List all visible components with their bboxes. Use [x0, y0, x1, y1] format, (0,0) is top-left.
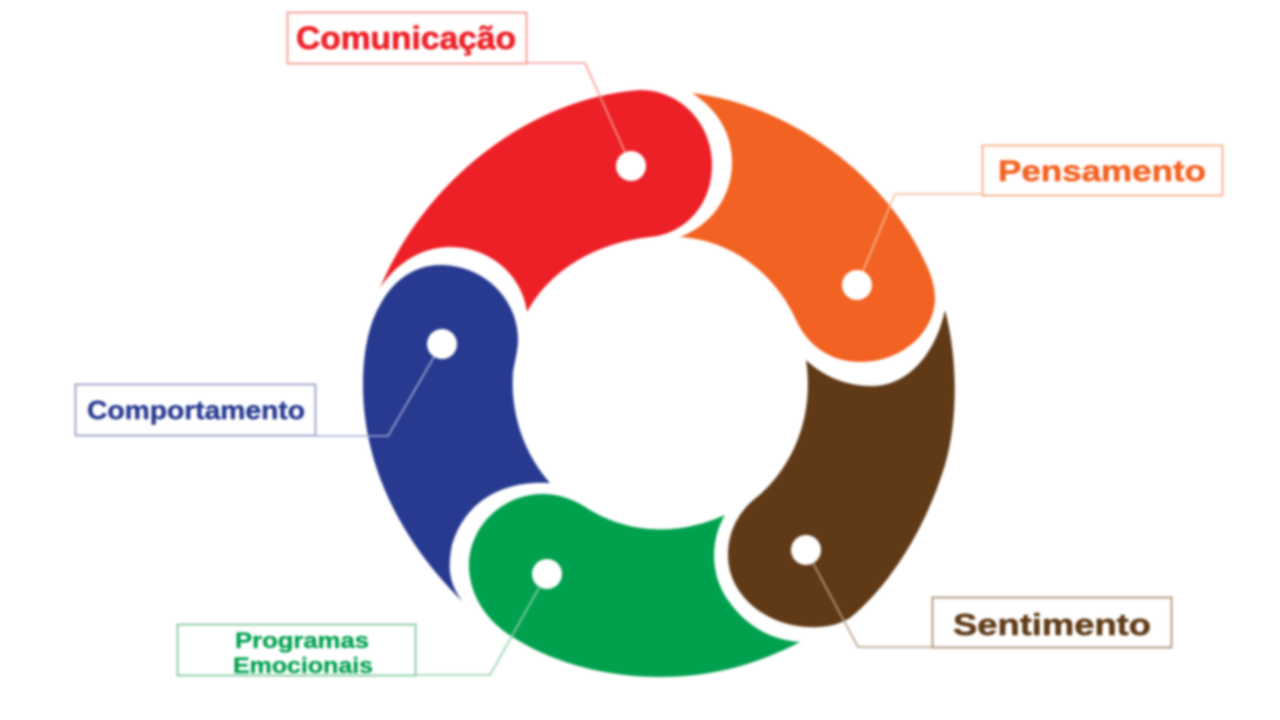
label: Programas Emocionais: Programas: [235, 628, 369, 653]
segment: Comportamento (blue): [363, 265, 550, 602]
label: Programas Emocionais: [178, 586, 540, 678]
label: Sentimento: Sentimento: [953, 607, 1151, 642]
label: Comportamento: Comportamento: [87, 395, 305, 425]
label: Comunicação: [288, 12, 625, 152]
segment: Pensamento (orange): [680, 93, 935, 362]
label: Pensamento: Pensamento: [998, 155, 1206, 188]
segment: Comunicação (red): [380, 90, 712, 312]
segment: Programas Emocionais (green): [469, 494, 800, 677]
label: Pensamento: [863, 146, 1222, 271]
label: Comportamento: [76, 357, 434, 436]
segment: Sentimento (brown): [728, 310, 955, 627]
label: Comunicação: Comunicação: [296, 20, 516, 56]
label: Programas Emocionais: Emocionais: [233, 653, 373, 678]
label: Sentimento: [813, 563, 1172, 648]
